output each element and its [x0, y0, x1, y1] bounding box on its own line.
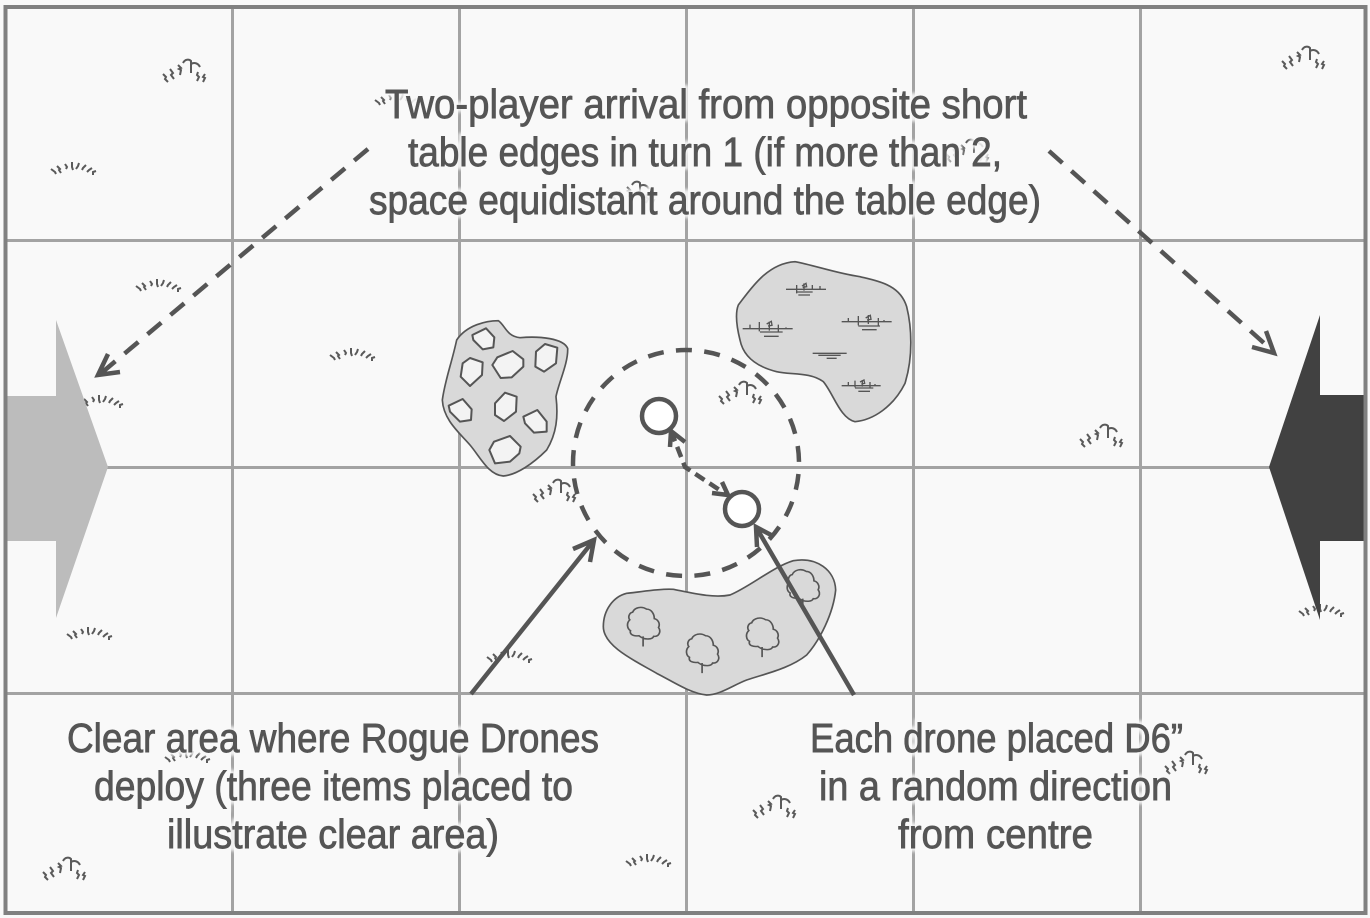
- solid arrow to lower drone: [756, 527, 854, 695]
- bottom-right caption: from centre: [898, 811, 1093, 857]
- solid arrow to clear area: [471, 540, 594, 694]
- top caption: space equidistant around the table edge): [369, 177, 1041, 223]
- right deployment arrow (dark): [1269, 315, 1367, 620]
- bottom-left caption: deploy (three items placed to: [94, 763, 573, 809]
- top caption: Two-player arrival from opposite short: [385, 81, 1028, 127]
- bottom-right caption: in a random direction: [819, 763, 1172, 809]
- top caption: table edges in turn 1 (if more than 2,: [408, 129, 1002, 175]
- top caption: [369, 81, 1041, 223]
- left deployment arrow (light): [6, 320, 108, 618]
- terrain: marsh patch: [737, 262, 911, 422]
- drone marker: upper: [642, 399, 676, 433]
- bottom-right caption: [810, 715, 1183, 857]
- terrain: rocky patch: [442, 321, 568, 476]
- dashed clear area circle: [573, 350, 799, 576]
- dashed double arrow between drones: [670, 431, 728, 495]
- dashed arrow to left arrival: [98, 149, 368, 375]
- dashed arrow to right arrival: [1049, 151, 1274, 353]
- bottom-left caption: illustrate clear area): [167, 811, 499, 857]
- bottom-right caption: Each drone placed D6”: [810, 715, 1183, 761]
- bottom-left caption: [67, 715, 599, 857]
- terrain: wood patch: [603, 560, 836, 695]
- drone marker: lower: [725, 492, 759, 526]
- bottom-left caption: Clear area where Rogue Drones: [67, 715, 599, 761]
